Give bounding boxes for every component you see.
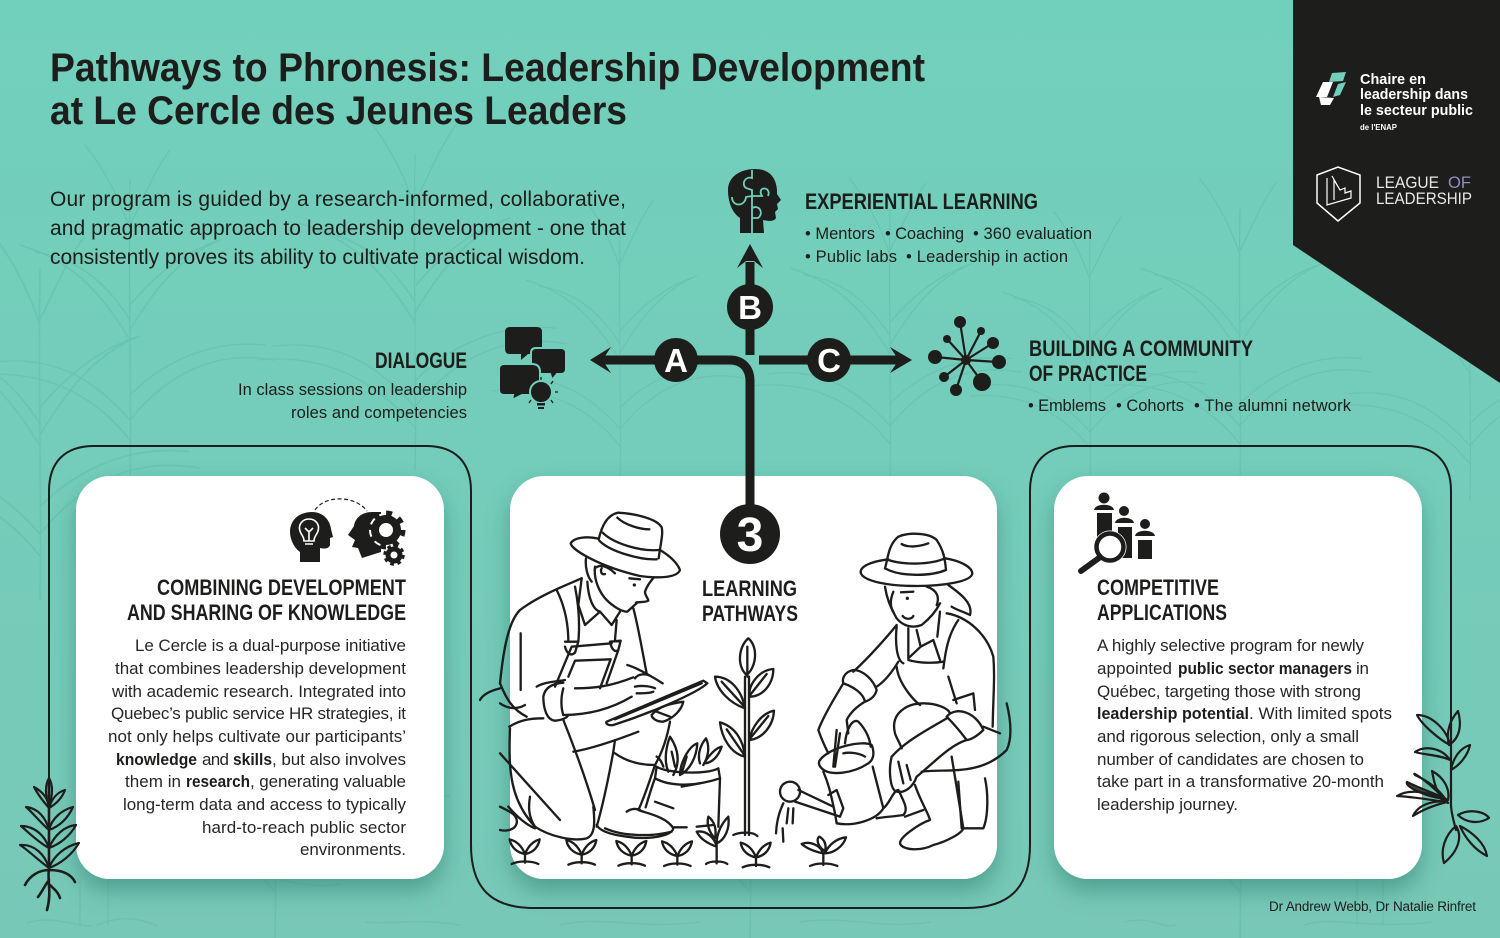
logo: Chaire en leadership: le secteur public (1360, 102, 1473, 119)
label: learning pathways (702, 576, 798, 626)
competitive applications body text: A highly selective program for newly (1097, 636, 1364, 655)
experiential learning bullets: • Mentors (805, 225, 875, 243)
logo: Chaire en leadership: Chaire en (1360, 71, 1426, 88)
heading: community of practice (1028, 336, 1352, 415)
heading: competitive applications: APPLICATIONS (1097, 600, 1227, 625)
heading: combining development (127, 575, 406, 625)
logo: Chaire en leadership: de l'ENAP (1360, 123, 1398, 132)
competitive applications body text: and rigorous selection, only a small (1097, 727, 1359, 746)
credits: Dr Andrew Webb, Dr Natalie Rinfret (1269, 899, 1476, 914)
dialogue description (238, 381, 467, 422)
combining development body text: Le Cercle is a dual-purpose initiative (135, 636, 406, 655)
experiential learning bullets: • Coaching (885, 225, 964, 243)
left plant with roots (20, 778, 79, 910)
label: learning pathways: LEARNING (702, 576, 797, 601)
title: at Le Cercle des Jeunes Leaders (50, 89, 627, 133)
competitive applications body text: in (1356, 659, 1369, 678)
learning pathways node 3 and label: 3 (737, 509, 763, 562)
combining development body text: skills (233, 751, 272, 769)
competitive applications body text: take part in a transformative 20-month (1097, 772, 1384, 791)
combining development body text: , but also involves (272, 750, 406, 769)
combining development body text: long-term data and access to typically (123, 795, 406, 814)
combining development body text: with academic research. Integrated into (111, 682, 406, 701)
combining development body text: Quebec’s public service HR strategies, it (111, 704, 406, 723)
right plant with corn (1397, 711, 1489, 863)
logo: Chaire en leadership: leadership dans (1360, 86, 1468, 103)
node B (727, 284, 773, 330)
dialogue description: roles and competencies (291, 404, 467, 422)
combining development body text: not only helps cultivate our participants’ (108, 727, 406, 746)
logo: League of Leadership: OF (1448, 173, 1471, 192)
title (50, 46, 925, 133)
competitive applications body text: leadership journey. (1097, 795, 1238, 814)
community bullets: • The alumni network (1194, 397, 1352, 415)
heading: competitive applications: COMPETITIVE (1097, 575, 1219, 600)
learning pathways node 3 and label (702, 504, 798, 626)
community bullets: • Emblems (1028, 397, 1106, 415)
heading: competitive applications (1097, 575, 1227, 625)
title: Pathways to Phronesis: Leadership Development (50, 46, 925, 90)
heading: experiential learning (805, 189, 1092, 266)
icon: speech bubbles and bulb (499, 327, 566, 409)
icon: podium candidates with magnifier (1081, 492, 1155, 571)
competitive applications body text: . With limited spots (1249, 704, 1392, 723)
panel: competitive applications card (1054, 476, 1422, 879)
community bullets: • Cohorts (1116, 397, 1184, 415)
intro text (50, 188, 626, 269)
central plant (715, 638, 774, 836)
icon: network (928, 316, 1006, 396)
heading: combining development: COMBINING DEVELOPMENT (157, 575, 406, 600)
logo: League of Leadership (1317, 167, 1472, 221)
combining development body text: them in (125, 772, 181, 791)
experiential learning bullets (805, 225, 1092, 266)
intro text: consistently proves its ability to cultivate practical wisdom. (50, 246, 585, 269)
gardener with watering can (776, 534, 1010, 849)
competitive applications body text (1097, 636, 1392, 814)
heading: community of practice: BUILDING A COMMUNITY (1029, 336, 1253, 361)
seedling row (510, 817, 846, 867)
combining development body text (108, 636, 406, 859)
heading: experiential learning: EXPERIENTIAL LEARNING (805, 189, 1038, 214)
pathway arrows (590, 244, 912, 510)
panel: combining development card (76, 476, 444, 879)
seed bag with plants (646, 737, 722, 827)
combining development body text: hard-to-reach public sector (202, 818, 406, 837)
left card contents (108, 499, 406, 859)
combining development body text: , generating valuable (250, 772, 406, 791)
heading: dialogue: DIALOGUE (375, 348, 467, 373)
logo: League of Leadership: LEADERSHIP (1376, 189, 1472, 208)
competitive applications body text: leadership potential (1097, 705, 1249, 723)
node A: A (664, 342, 688, 379)
panel: learning pathways card (510, 476, 997, 879)
competitive applications body text: public sector managers (1178, 660, 1352, 678)
combining development body text: research (186, 773, 250, 791)
community bullets (1028, 397, 1352, 415)
combining development body text: knowledge (116, 751, 197, 769)
combining development body text: and (202, 750, 229, 769)
corner banner with logos (1293, 0, 1500, 383)
outline path around panels (49, 446, 1451, 908)
right card contents (1081, 492, 1392, 814)
node B: B (738, 289, 762, 326)
experiential learning bullets: • Leadership in action (906, 248, 1068, 266)
logo: Chaire en leadership (1316, 71, 1473, 132)
heading: community of practice: OF PRACTICE (1029, 361, 1147, 386)
competitive applications body text: number of candidates are chosen to (1097, 750, 1364, 769)
node C (807, 338, 851, 382)
icon: puzzle head (728, 169, 781, 233)
label: learning pathways: PATHWAYS (702, 601, 798, 626)
heading: dialogue (238, 348, 467, 422)
combining development body text: environments. (300, 840, 406, 859)
heading: combining development: AND SHARING OF KNOWLEDGE (127, 600, 406, 625)
competitive applications body text: appointed (1097, 659, 1172, 678)
intro text: and pragmatic approach to leadership development - one that (50, 217, 626, 240)
competitive applications body text: Québec, targeting those with strong (1097, 682, 1361, 701)
logo: League of Leadership: LEAGUE (1376, 173, 1439, 192)
center card illustration: gardeners (480, 513, 1010, 867)
combining development body text: that combines leadership development (115, 659, 406, 678)
gardener with clipboard (480, 513, 707, 839)
icon: head with bulb and gears (290, 499, 403, 564)
experiential learning bullets: • Public labs (805, 248, 897, 266)
node C: C (817, 342, 841, 379)
node A (654, 338, 698, 382)
experiential learning bullets: • 360 evaluation (973, 225, 1092, 243)
dialogue description: In class sessions on leadership (238, 381, 467, 399)
intro text: Our program is guided by a research-informed, collaborative, (50, 188, 626, 211)
